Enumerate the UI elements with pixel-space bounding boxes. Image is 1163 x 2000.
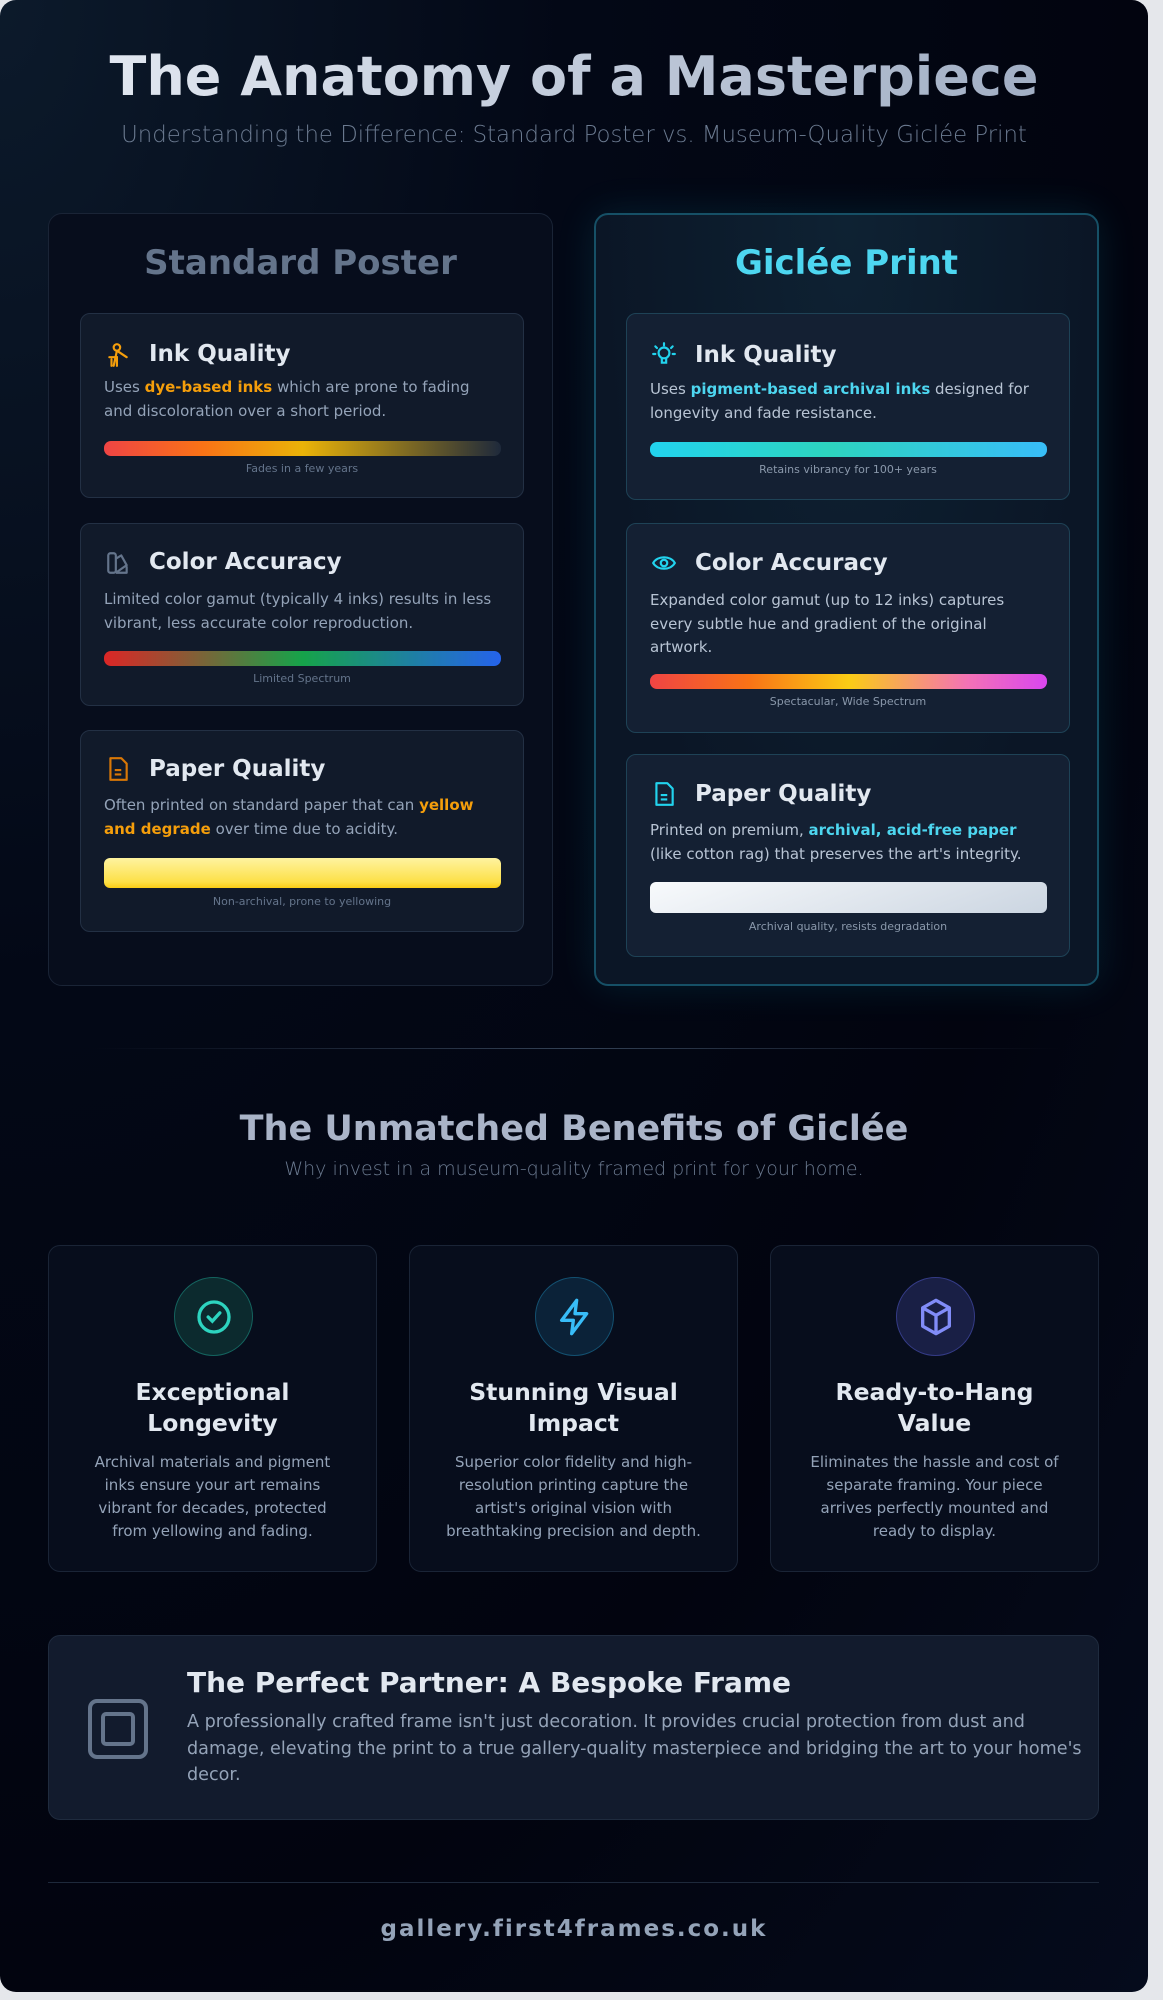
text: Uses dye-based inks which are prone to fading and discoloration over a short period. (104, 378, 470, 420)
frame text: damage, elevating the print to a true gallery-quality masterpiece and bridging the art to your home's (187, 1738, 1082, 1758)
icon: frame (88, 1699, 148, 1759)
bar: limited spectrum (104, 651, 501, 666)
card: ink quality (poster): Fades in a few years (246, 462, 358, 475)
footer: gallery.first4frames.co.uk (381, 1916, 767, 1942)
icon: document (655, 782, 674, 806)
heading: giclee print: Giclée Print (735, 243, 958, 283)
card: color accuracy (giclee): Expanded color gamut (up to 12 inks) captures every subtle hue and gradient of the original artwork. (650, 591, 1004, 656)
section subtitle: Why invest in a museum-quality framed print for your home. (284, 1158, 864, 1180)
frame text: A professionally crafted frame isn't just decoration. It provides crucial protection from dust and (187, 1712, 1025, 1732)
card: ink quality (poster) (80, 313, 524, 498)
card: ink quality (poster): Ink Quality (149, 341, 290, 367)
frame text (187, 1712, 1082, 1785)
subtitle: Understanding the Difference: Standard Poster vs. Museum-Quality Giclée Print (121, 122, 1027, 148)
card: color accuracy (poster): Limited Spectrum (253, 672, 351, 685)
bar: yellow paper (104, 858, 501, 888)
heading: standard poster: Standard Poster (144, 243, 457, 283)
panel: standard poster (48, 213, 553, 986)
bar: wide spectrum (650, 674, 1047, 689)
icon: lightbulb (652, 342, 676, 364)
benefit: ready to hang: Eliminates the hassle and cost of separate framing. Your piece arrives perfectly mounted and ready to display. (810, 1453, 1059, 1540)
icon: lightning (535, 1277, 614, 1356)
card: color accuracy (poster): Limited color gamut (typically 4 inks) results in less vibrant, less accurate color reproduction. (104, 590, 491, 632)
bar: fading (104, 441, 501, 456)
card: paper quality (giclee): Archival quality, resists degradation (749, 920, 947, 933)
icon: cube (896, 1277, 975, 1356)
benefit: visual impact (409, 1245, 738, 1572)
icon: swatch (107, 552, 128, 574)
bar: white paper (650, 882, 1047, 913)
icon: ink (108, 343, 128, 367)
card: paper quality (giclee): Paper Quality (695, 781, 871, 807)
benefit: longevity: Longevity (147, 1409, 278, 1437)
card: paper quality (poster) (80, 730, 524, 932)
card: paper quality (poster): Often printed on standard paper that can yellow and degrade over time due to acidity. (104, 796, 473, 838)
bar: vibrant (650, 442, 1047, 457)
card: color accuracy (poster) (80, 523, 524, 706)
benefit: visual impact: Stunning Visual (469, 1378, 678, 1406)
card: ink quality (giclee): Uses pigment-based archival inks designed for longevity and fade resistance. (650, 380, 1029, 422)
card: paper quality (poster): Paper Quality (149, 756, 325, 782)
benefit: visual impact: Impact (528, 1409, 619, 1437)
card: ink quality (giclee): Ink Quality (695, 342, 836, 368)
section title: benefits: The Unmatched Benefits of Giclée (240, 1109, 908, 1149)
card: paper quality (poster): Non-archival, prone to yellowing (213, 895, 391, 908)
benefit: ready to hang (770, 1245, 1099, 1572)
card: color accuracy (giclee) (626, 523, 1070, 733)
frame title: The Perfect Partner: A Bespoke Frame (187, 1666, 791, 1699)
title: The Anatomy of a Masterpiece (110, 45, 1038, 108)
icon: eye (652, 556, 676, 570)
benefit: ready to hang: Value (898, 1409, 971, 1437)
card: color accuracy (poster): Color Accuracy (149, 549, 342, 575)
icon: document (109, 757, 128, 781)
card: ink quality (giclee) (626, 313, 1070, 500)
card: paper quality (giclee) (626, 754, 1070, 957)
card: paper quality (giclee): Printed on premium, archival, acid-free paper (like cotton rag) that preserves the art's integrity. (650, 821, 1022, 862)
benefit: ready to hang: Ready-to-Hang (836, 1378, 1034, 1406)
panel: bespoke frame (48, 1635, 1099, 1820)
icon: check circle (174, 1277, 253, 1356)
card: color accuracy (giclee): Color Accuracy (695, 550, 888, 576)
benefit: longevity: Archival materials and pigment inks ensure your art remains vibrant for decades, protected from yellowing and fading. (95, 1453, 330, 1540)
benefit: longevity (48, 1245, 377, 1572)
card: ink quality (giclee): Retains vibrancy for 100+ years (759, 463, 937, 476)
card: color accuracy (giclee): Spectacular, Wide Spectrum (770, 695, 926, 708)
frame text: decor. (187, 1765, 241, 1785)
panel: giclee print (594, 213, 1099, 986)
benefit: visual impact: Superior color fidelity and high-resolution printing capture the artist's original vision with breathtaking precision and depth. (446, 1453, 701, 1540)
benefit: longevity: Exceptional (136, 1378, 289, 1406)
